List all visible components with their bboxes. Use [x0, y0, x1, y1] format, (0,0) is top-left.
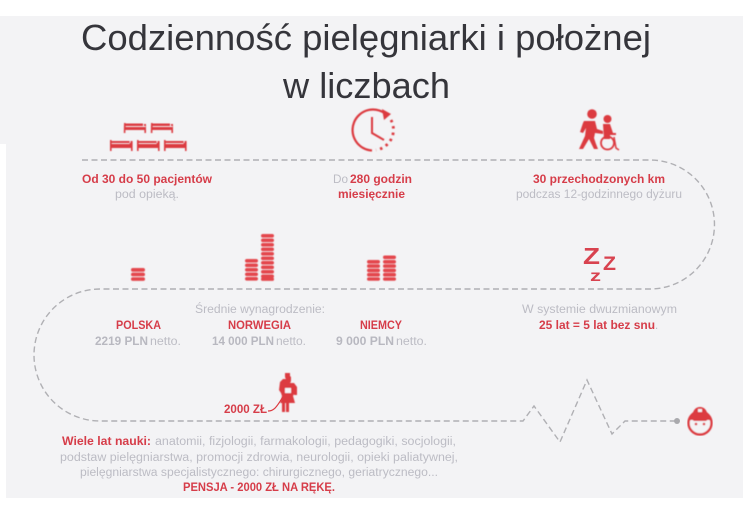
text: years of study: anatomii, fizjologii, farmakologii, pedagogiki, socjologii, [155, 436, 456, 448]
text: patients [82, 174, 212, 201]
icon: coins Niemcy [367, 256, 396, 281]
icon: coins Polska [131, 268, 145, 281]
dashed timeline path [34, 160, 714, 442]
text: distance [516, 174, 682, 201]
text: hours: 280 godzin [350, 174, 412, 186]
icon: sleep Zzz: z [590, 268, 601, 285]
text: Niemcy: 9 000 PLN [336, 336, 394, 348]
text: Polska [95, 320, 181, 348]
text: distance: 30 przechodzonych km [533, 174, 665, 186]
text: average salary heading: Średnie wynagrodzenie: [195, 303, 325, 316]
text: hours [333, 174, 412, 201]
text: shift system [522, 304, 677, 332]
text: shift system: . [655, 320, 658, 332]
text: Niemcy: NIEMCY [360, 320, 402, 332]
icon: sleep Zzz [583, 243, 616, 285]
text: Norwegia [212, 320, 306, 348]
icon: nurse with 2000 zł [224, 373, 297, 416]
text: years of study: pielęgniarstwa specjalistycznego: chirurgicznego, geriatrycznego... [80, 467, 438, 479]
text: Norwegia: NORWEGIA [228, 320, 291, 332]
text: shift system: W systemie dwuzmianowym [522, 304, 677, 316]
text: Norwegia: netto. [276, 336, 306, 348]
icon: clock [353, 109, 393, 150]
text: Niemcy: netto. [396, 336, 427, 348]
text: Norwegia: 14 000 PLN [212, 336, 274, 348]
text: years of study: Wiele lat nauki: [62, 436, 151, 448]
title: Codzienność pielęgniarki i położnej [81, 17, 651, 58]
icon: sleep Zzz: Z [603, 254, 616, 275]
text: Polska: POLSKA [116, 320, 161, 332]
text: years of study: PENSJA - 2000 ZŁ NA RĘKĘ. [183, 482, 335, 494]
text: Polska: 2219 PLN [95, 336, 148, 348]
text: years of study: podstaw pielęgniarstwa, promocji zdrowia, neurologii, opieki paliatywnej, [60, 452, 458, 464]
timeline end dot [674, 418, 680, 424]
text: distance: podczas 12-godzinnego dyżuru [516, 189, 682, 201]
text: Polska: netto. [150, 336, 181, 348]
icon: coins Norwegia [245, 234, 274, 281]
text: hours: miesięcznie [338, 189, 405, 201]
title [81, 17, 651, 106]
icon: sleep Zzz: Z [583, 243, 600, 269]
title: w liczbach [282, 65, 450, 106]
text: patients: pod opieką. [115, 189, 179, 201]
icon: nurse face [688, 407, 712, 434]
icon: beds [110, 123, 187, 151]
text: hours: Do [333, 174, 348, 186]
icon: carer with wheelchair [579, 109, 619, 150]
text: years of study [60, 436, 458, 494]
text: shift system: 25 lat = 5 lat bez snu [539, 320, 655, 332]
text: patients: Od 30 do 50 pacjentów [82, 174, 212, 186]
icon: nurse with 2000 zł: 2000 ZŁ [224, 404, 267, 416]
text: Niemcy [336, 320, 427, 348]
